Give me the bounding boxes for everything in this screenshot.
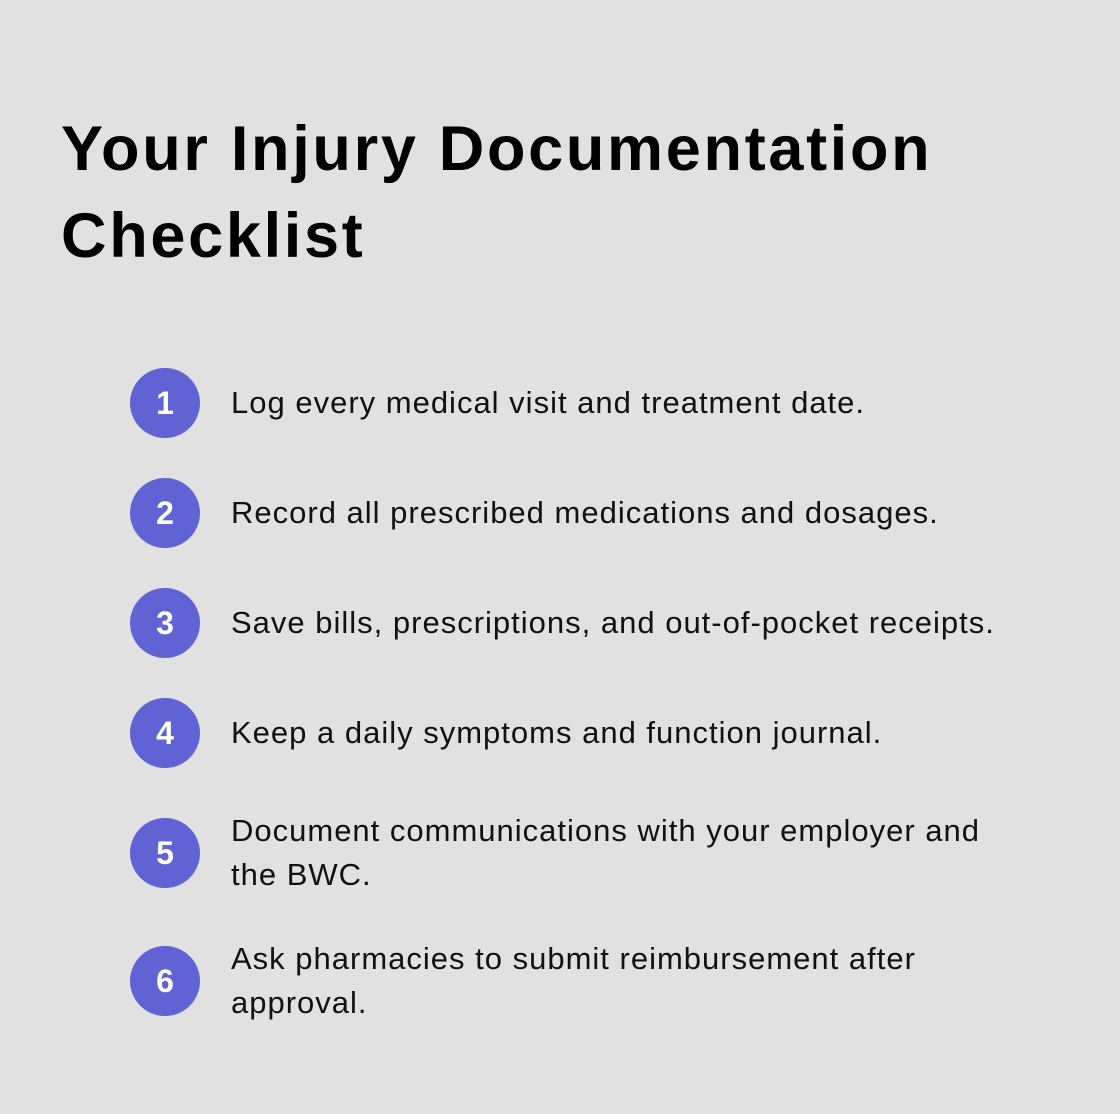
- item 6: 6: [156, 963, 174, 999]
- item 2: Record all prescribed medications and dosages.: [231, 495, 939, 530]
- item 1: 1: [156, 385, 174, 421]
- item 3: 3: [156, 605, 174, 641]
- item 3: [130, 588, 995, 658]
- item 4: [130, 698, 882, 768]
- item 5: the BWC.: [231, 857, 372, 892]
- item 5: [130, 813, 980, 892]
- item 4: 4: [156, 715, 174, 751]
- title: Checklist: [61, 201, 365, 271]
- item 1: [130, 368, 865, 438]
- item 5: 5: [156, 835, 174, 871]
- item 6: approval.: [231, 985, 368, 1020]
- item 2: [130, 478, 939, 548]
- item 6: [130, 941, 916, 1020]
- item 6: Ask pharmacies to submit reimbursement after: [231, 941, 916, 976]
- item 1: Log every medical visit and treatment date.: [231, 385, 865, 420]
- item 5: Document communications with your employer and: [231, 813, 980, 848]
- item 3: Save bills, prescriptions, and out-of-pocket receipts.: [231, 605, 995, 640]
- item 4: Keep a daily symptoms and function journal.: [231, 715, 882, 750]
- title: [61, 114, 932, 271]
- title: Your Injury Documentation: [61, 114, 932, 184]
- item 2: 2: [156, 495, 174, 531]
